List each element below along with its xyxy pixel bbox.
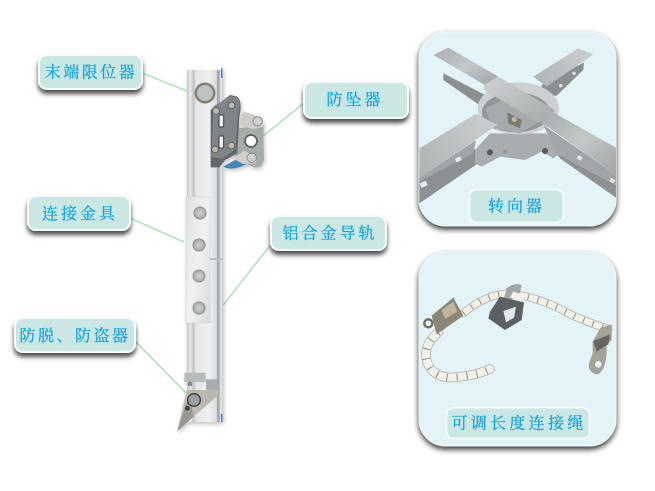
anti-detach and anti-theft device (177, 373, 219, 431)
ring and clamps (475, 133, 561, 167)
panel: adjustable lanyard (419, 252, 616, 446)
label: 转向器 (470, 190, 564, 222)
label: 铝合金导轨: 铝合金导轨 (282, 224, 378, 242)
label: 末端限位器: 末端限位器 (45, 64, 137, 82)
lanyard photo (424, 284, 612, 378)
connecting plate with bolts (186, 197, 223, 323)
label: 可调长度连接绳: 可调长度连接绳 (451, 414, 587, 432)
label: 防脱、防盗器 (15, 318, 135, 352)
aluminium rail assembly (177, 68, 264, 431)
panel: swivel connector (419, 32, 616, 226)
label: 末端限位器 (39, 55, 142, 89)
snap hook (589, 324, 612, 374)
aluminium guide rail (187, 68, 223, 422)
label: 转向器: 转向器 (488, 198, 545, 216)
label: 铝合金导轨 (271, 216, 386, 250)
swivel connector photo (419, 48, 616, 203)
label: 连接金具: 连接金具 (42, 205, 118, 223)
rope (426, 293, 608, 378)
webs (443, 73, 488, 107)
bolts (542, 148, 548, 154)
end stop bolt (194, 82, 216, 104)
label: 防脱、防盗器: 防脱、防盗器 (19, 327, 131, 345)
fall arrester (211, 95, 264, 169)
ring (501, 284, 522, 312)
label: 防坠器 (304, 82, 408, 118)
leader lines (130, 73, 304, 394)
rope grab (432, 298, 463, 334)
label: 可调长度连接绳 (446, 408, 590, 438)
label: 连接金具 (28, 196, 130, 230)
label: 防坠器: 防坠器 (326, 91, 384, 109)
flanges (433, 48, 498, 85)
